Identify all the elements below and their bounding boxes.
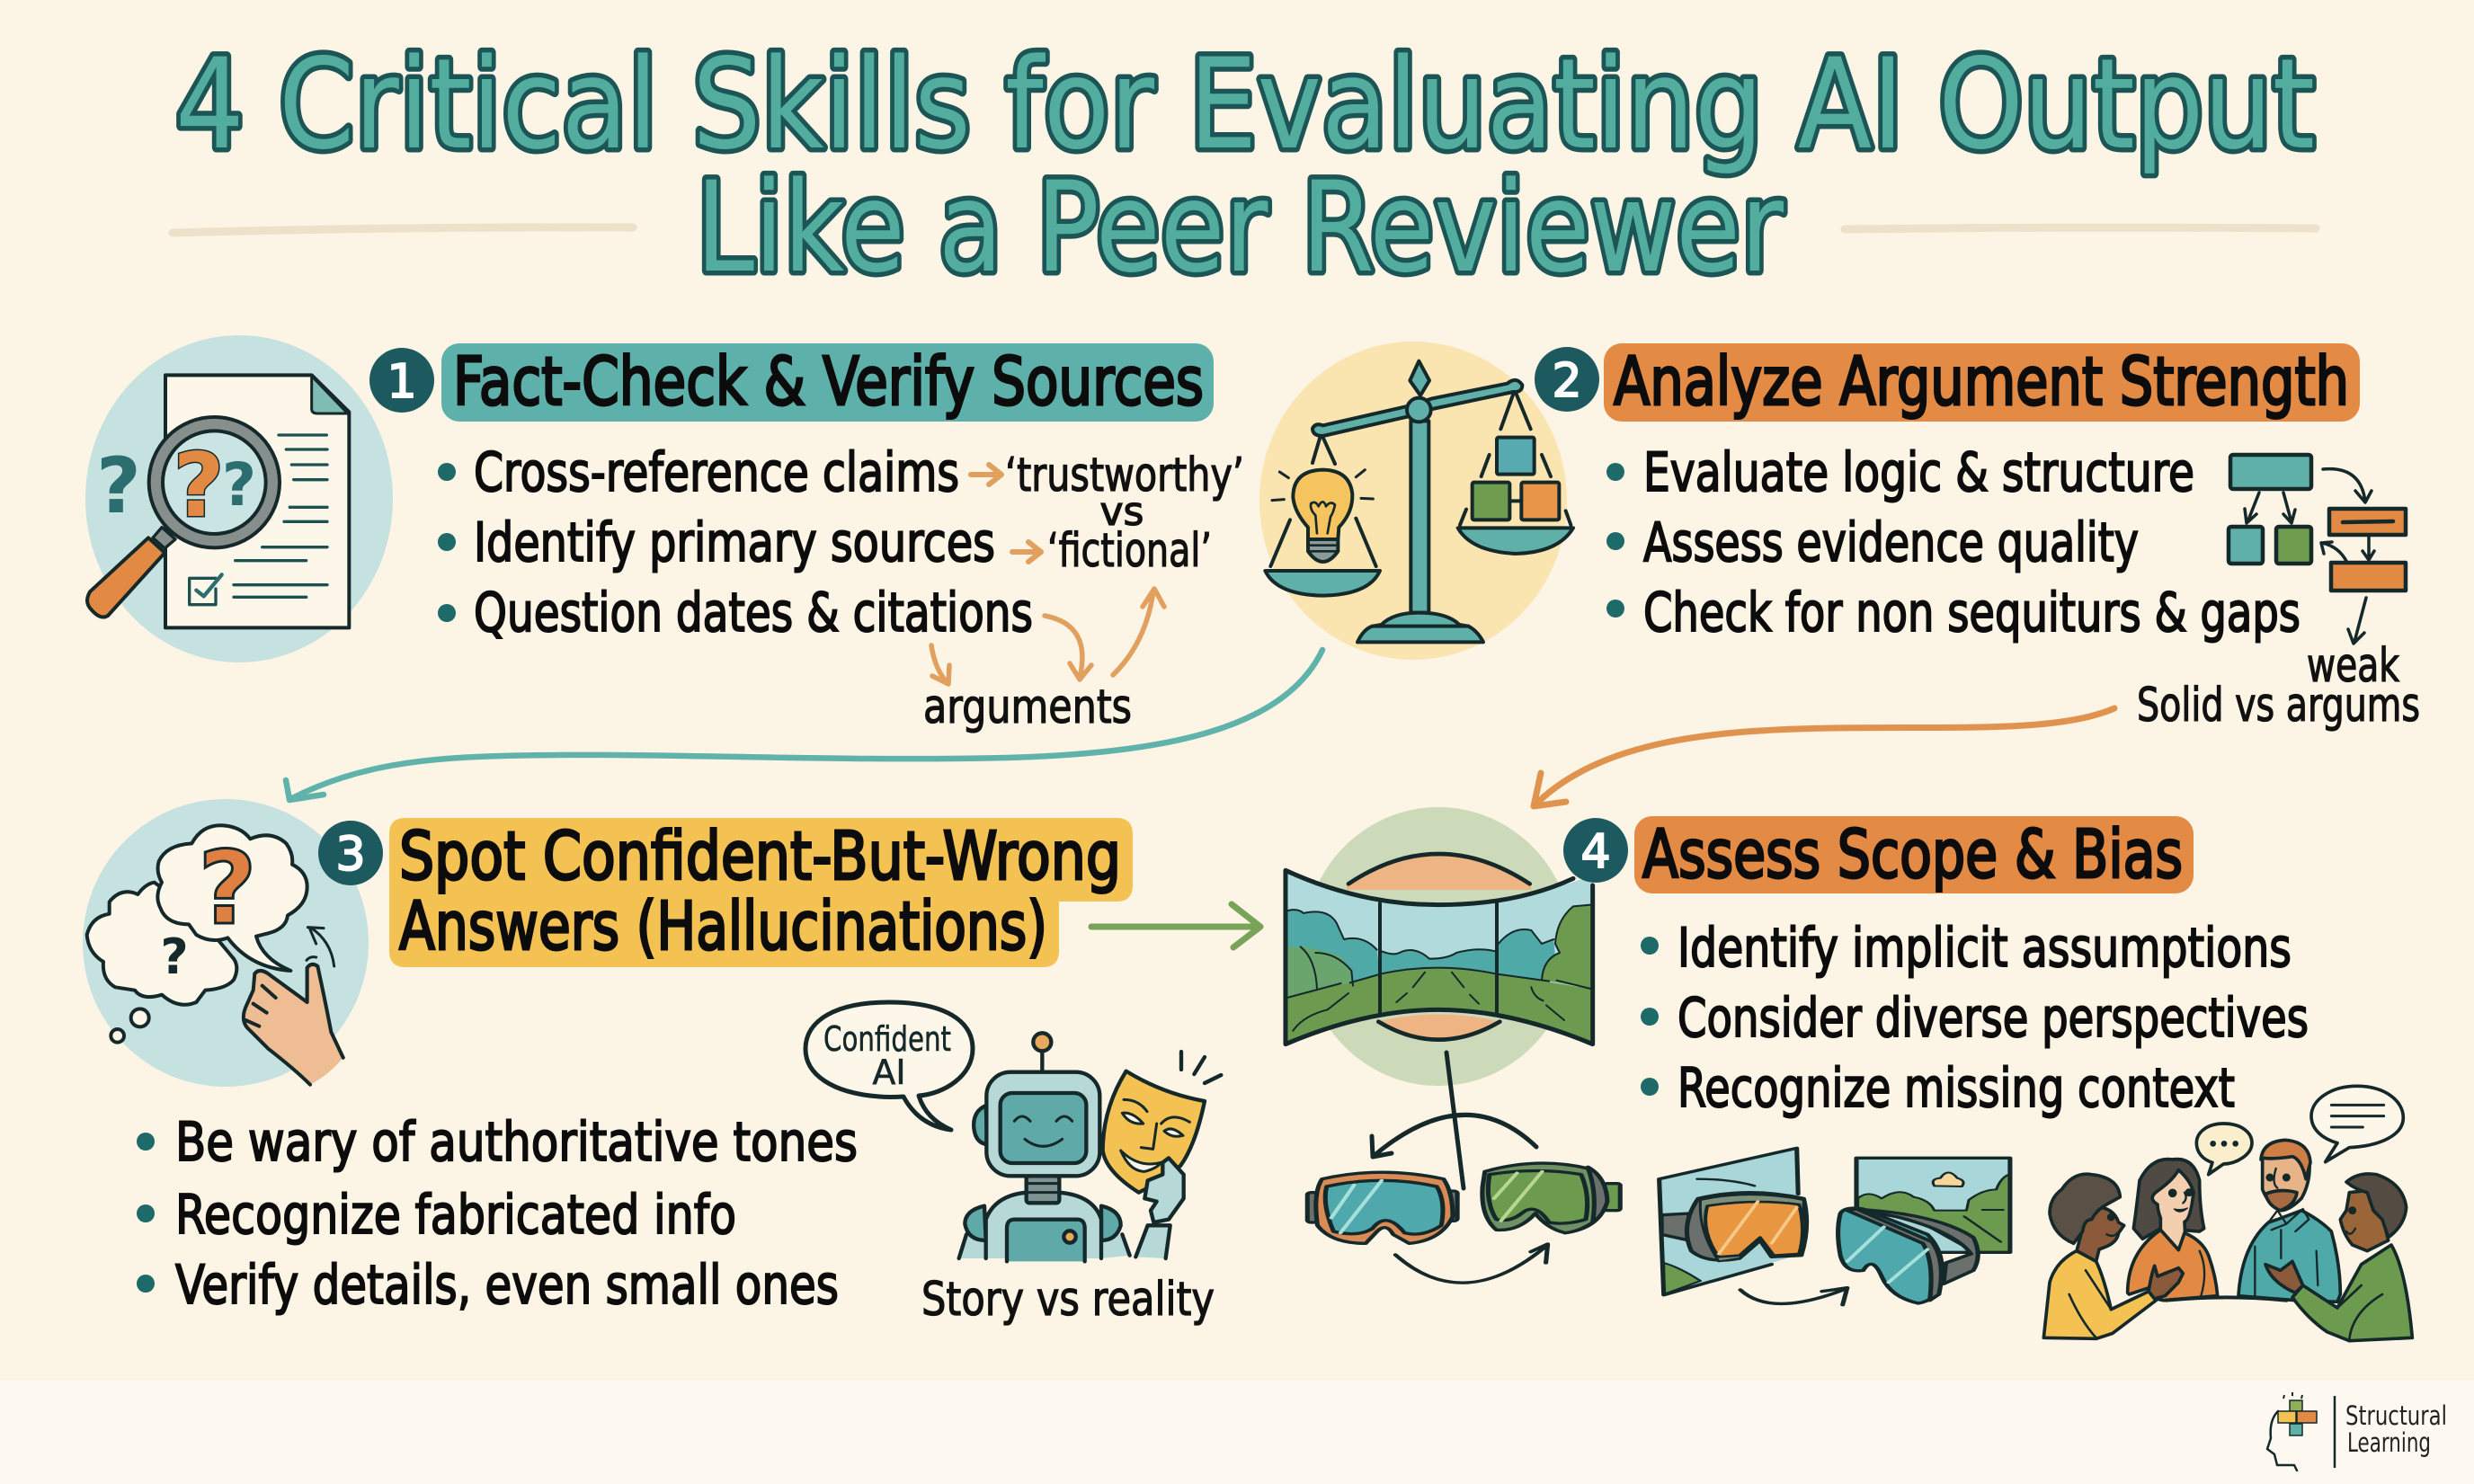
bullet list 2: Assess evidence quality [1643,511,2139,574]
number badge 3: 3 [335,828,366,882]
bullet list 2: Check for non sequiturs & gaps [1643,582,2300,644]
person in green [2265,1174,2412,1341]
icon: panorama landscape [1286,807,1593,1086]
bullet list 3: Be wary of authoritative tones [175,1111,858,1174]
speech bubble: confident AI [805,1002,973,1130]
bullet list 1: Cross-reference claims [474,441,959,504]
logo: structural learning: Structural [2345,1400,2447,1431]
arrow: teal connector to skill 3 [286,650,1322,800]
label: weak: weak [2307,639,2399,693]
person in orange [2128,1160,2218,1301]
bullet list 1: Question dates & citations [474,582,1033,644]
arrow: green to skill 4 [1091,904,1260,947]
annotation: trustworthy vs fictional: ‘fictional’ [1047,524,1212,578]
bullet list 4: Identify implicit assumptions [1678,917,2292,980]
icon: document and magnifying glass: ? [96,441,141,531]
icon: document and magnifying glass: ? [222,450,256,520]
number badge 1: 1 [387,355,417,409]
title [175,31,2315,300]
caption: story vs reality: Story vs reality [921,1273,1215,1327]
heading: fact-check: Fact-Check & Verify Sources [453,343,1204,421]
heading: assess scope and bias: Assess Scope & Bias [1642,816,2183,893]
heading: spot confident-but-wrong: Answers (Hallucinations) [399,888,1047,965]
label: arguments: arguments [923,680,1132,734]
speech bubble: confident AI: Confident [823,1019,951,1059]
number badge 3 [318,821,383,885]
arrow: orange connector to skill 4 [1534,708,2114,806]
bullet list 3: Verify details, even small ones [175,1254,839,1317]
icon: document and magnifying glass [85,335,393,662]
icon: thought clouds and hand: ? [160,929,189,985]
icon: thought clouds and hand [83,799,369,1087]
arrows to arguments [931,589,1164,684]
annotation: trustworthy vs fictional [971,449,1244,578]
icon: four people discussing [2043,1086,2412,1341]
bullet list 4: Consider diverse perspectives [1678,987,2309,1050]
icon: document and magnifying glass: ? [174,435,224,538]
panel: skill 3 hallucinations [83,799,1260,1327]
icon: goggles and landscape views [1660,1148,2010,1305]
annotation: trustworthy vs fictional: ‘trustworthy’ [1005,449,1244,502]
bullet list 3 [137,1111,858,1317]
bullet list 4: Recognize missing context [1678,1057,2235,1120]
person in teal [2238,1140,2340,1302]
annotation: trustworthy vs fictional: vs [1100,489,1144,535]
heading: spot confident-but-wrong: Spot Confident-But-Wrong [399,818,1121,895]
bullet list 4 [1641,917,2309,1120]
icon: balance scale [1259,342,1573,660]
bullet list 2 [1606,441,2300,644]
diagram: argument flow [2229,455,2406,644]
bullet list 3: Recognize fabricated info [175,1184,736,1247]
number badge 2 [1535,347,1599,412]
panel: skill 2 argument strength [1259,342,2420,733]
speech bubble: confident AI: AI [872,1053,906,1092]
icon: robot with mask [959,1033,1221,1261]
logo: structural learning [2267,1392,2447,1471]
title: Like a Peer Reviewer [696,155,1784,300]
icon: thought clouds and hand: ? [199,831,256,947]
icon: swapping goggles [1307,1053,1620,1283]
bullet list 2: Evaluate logic & structure [1643,441,2194,504]
number badge 2: 2 [1552,354,1582,408]
person in yellow [2043,1174,2183,1338]
panel: skill 1 fact-check [85,335,1244,734]
speech bubble large [2311,1086,2403,1162]
bullet list 1 [438,441,1033,644]
speech bubble small [2196,1124,2252,1175]
number badge 1 [369,348,434,413]
bullet list 1: Identify primary sources [474,511,995,574]
heading: spot confident-but-wrong [389,818,1133,967]
panel: skill 4 scope and bias [1286,807,2412,1341]
logo: structural learning: Learning [2347,1427,2431,1458]
number badge 4 [1563,818,1628,883]
number badge 4: 4 [1580,825,1611,879]
